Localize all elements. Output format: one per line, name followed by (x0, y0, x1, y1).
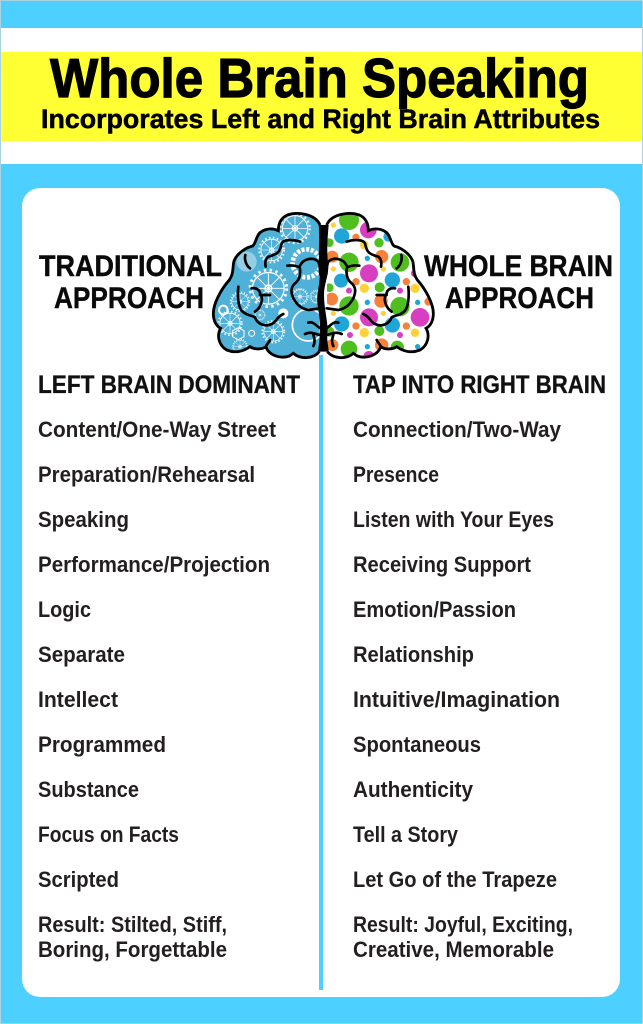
left column items: Logic (38, 597, 91, 622)
left column: left brain dominant list (38, 371, 300, 962)
left column items: Result: Stilted, Stiff, (38, 912, 227, 937)
heading: traditional approach: APPROACH (54, 282, 204, 315)
right column items: Intuitive/Imagination (353, 687, 560, 712)
right column items: Receiving Support (353, 552, 532, 577)
right column items: Emotion/Passion (353, 597, 516, 622)
left column items: Separate (38, 642, 125, 667)
right column items: Result: Joyful, Exciting, (353, 912, 573, 937)
left column items: Speaking (38, 507, 129, 532)
heading: whole brain approach (424, 250, 613, 315)
left column heading: LEFT BRAIN DOMINANT (38, 371, 300, 399)
left column items: Programmed (38, 732, 166, 757)
right column items: Relationship (353, 642, 474, 667)
right column items: Connection/Two-Way (353, 417, 562, 442)
left column items: Boring, Forgettable (38, 937, 227, 962)
right column items: Listen with Your Eyes (353, 507, 554, 532)
left column items: Focus on Facts (38, 822, 179, 847)
right column items: Spontaneous (353, 732, 481, 757)
title: Whole Brain Speaking (50, 47, 589, 109)
heading: whole brain approach: APPROACH (445, 282, 594, 315)
left column items (38, 417, 277, 962)
left column items: Content/One-Way Street (38, 417, 277, 442)
heading: whole brain approach: WHOLE BRAIN (424, 250, 613, 283)
left column items: Preparation/Rehearsal (38, 462, 255, 487)
right column: tap into right brain list (353, 371, 606, 962)
left column items: Intellect (38, 687, 119, 712)
left column items: Performance/Projection (38, 552, 270, 577)
right hemisphere with coloured dots (324, 210, 438, 362)
left hemisphere with gears (210, 210, 324, 360)
right column items (353, 417, 573, 962)
central fissure (317, 225, 329, 352)
right column items: Creative, Memorable (353, 937, 554, 962)
heading: traditional approach: TRADITIONAL (39, 250, 222, 283)
right column items: Authenticity (353, 777, 474, 802)
right column items: Let Go of the Trapeze (353, 867, 557, 892)
right column heading: TAP INTO RIGHT BRAIN (353, 371, 606, 399)
subtitle: Incorporates Left and Right Brain Attributes (41, 104, 600, 134)
left column items: Scripted (38, 867, 119, 892)
centre divider line (319, 355, 323, 990)
left column items: Substance (38, 777, 139, 802)
main white panel (22, 188, 620, 997)
right column items: Tell a Story (353, 822, 459, 847)
title band (1, 28, 642, 164)
heading: traditional approach (39, 250, 222, 315)
brain illustration (210, 210, 438, 362)
right column items: Presence (353, 462, 439, 487)
